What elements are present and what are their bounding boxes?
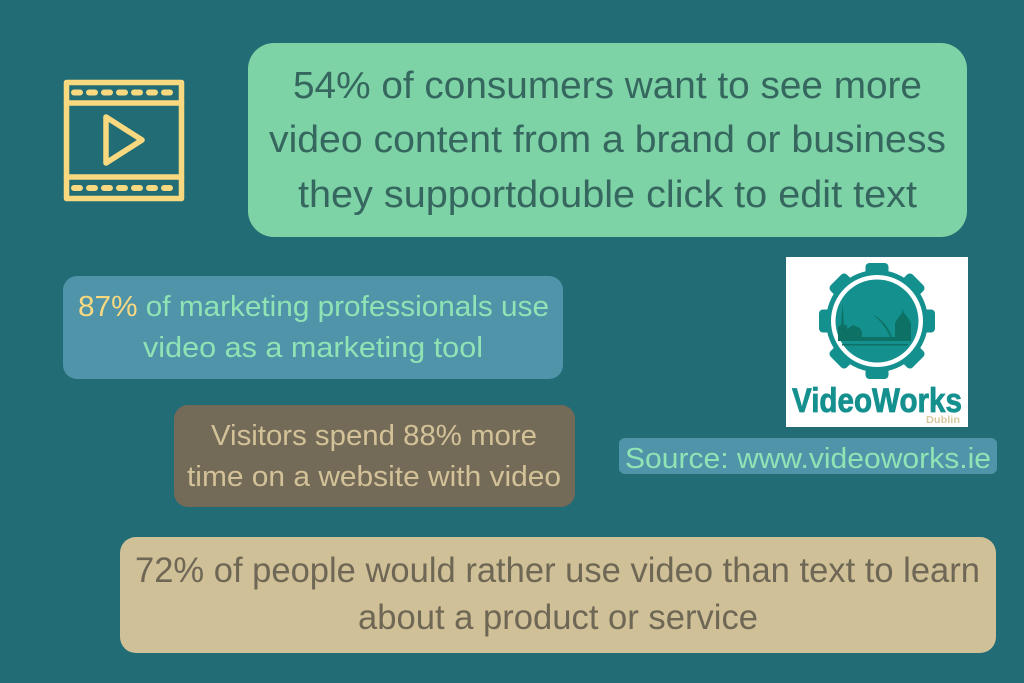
panel: 87% of marketing professionals: video as a marketing tool xyxy=(143,332,483,364)
source label: Source: www.videoworks.ie xyxy=(625,443,991,475)
panel: 87% of marketing professionals: 87% of marketing professionals use xyxy=(78,291,549,323)
panel: 54% of consumers: they supportdouble click to edit text xyxy=(298,174,917,216)
logo wordmark: VideoWorks xyxy=(792,382,962,420)
panel: 54% of consumers: video content from a brand or business xyxy=(269,119,946,161)
panel: 72% of people: 72% of people would rather use video than text to learn xyxy=(135,551,980,590)
panel: 87% of marketing professionals xyxy=(63,276,563,379)
panel: visitors spend 88% more time: time on a website with video xyxy=(187,461,561,493)
panel: 72% of people xyxy=(120,537,996,653)
logo subtitle: Dublin xyxy=(926,415,960,426)
logo skyline xyxy=(838,303,911,346)
panel: 54% of consumers: 54% of consumers want to see more xyxy=(293,65,922,107)
icon: video film strip with play button xyxy=(66,82,182,198)
panel: 54% of consumers xyxy=(248,43,967,237)
panel: visitors spend 88% more time: Visitors spend 88% more xyxy=(211,420,537,452)
logo gear xyxy=(819,263,935,379)
panel: 72% of people: about a product or service xyxy=(358,598,758,637)
logo: VideoWorks Dublin xyxy=(786,257,968,427)
panel: visitors spend 88% more time xyxy=(174,405,575,507)
